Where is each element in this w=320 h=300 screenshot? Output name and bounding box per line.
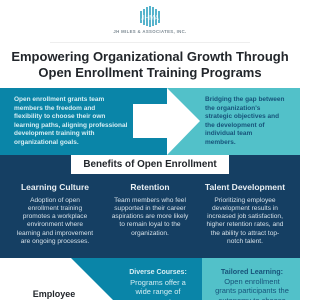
tailored learning text: Open enrollment [224,276,280,286]
employee heading: Employee [33,289,75,299]
retention: Retention [130,182,170,192]
intro right text: the development of [205,122,265,129]
benefits heading: Benefits of Open Enrollment [83,159,217,170]
panel: diverse courses [71,258,202,300]
learning culture: learning and improvement [17,230,93,237]
title [11,49,289,80]
learning culture: Adoption of open [30,196,80,204]
intro left text: organizational goals. [14,139,79,146]
arrow [133,88,200,155]
intro right text [205,96,284,146]
panel: tailored learning [202,258,300,300]
intro right text: Bridging the gap between [205,96,284,103]
talent development: Prioritizing employee [214,196,276,204]
intro left text [14,96,127,146]
panel: intro left [0,88,167,155]
intro left text: learning paths, aligning professional [14,122,127,129]
learning culture: promotes a workplace [23,213,87,220]
retention: aspirations are more likely [112,213,188,220]
intro right text: strategic objectives and [205,113,279,120]
intro left text: development training with [14,130,95,137]
talent development: increased job satisfaction, [207,213,283,220]
benefits heading [71,155,229,174]
panel: benefits [0,155,300,258]
intro left text: flexibility to choose their own [14,113,105,120]
logo [140,6,160,27]
title: Empowering Organizational Growth Through [11,49,289,64]
intro right text: individual team [205,130,252,137]
intro left text: members the freedom and [14,105,95,112]
tailored learning text [215,267,289,300]
retention [112,182,188,237]
talent development: higher retention rates, and [206,221,283,228]
retention: to remain loyal to the [119,221,181,228]
talent development: the ability to attract top- [211,230,279,237]
logo: JHMA [141,15,159,22]
diverse courses text: Diverse Courses: [129,269,187,276]
retention: supported in their career [114,205,186,212]
talent development: development results in [212,205,278,212]
intro right text: members. [205,139,236,146]
learning culture: are ongoing processes. [21,238,89,245]
learning culture: Learning Culture [21,182,89,192]
retention: organization. [131,230,169,237]
panel: intro right [167,88,300,155]
intro right text: the organization's [205,105,260,112]
tailored learning text: grants participants the [215,286,289,295]
learning culture [17,182,94,245]
intro left text: Open enrollment grants team [14,96,104,103]
learning culture: environment where [27,221,83,228]
diverse courses text: wide range of [135,287,181,296]
talent development: Talent Development [205,182,285,192]
title: Open Enrollment Training Programs [38,65,262,80]
diverse courses text [129,268,187,300]
diverse courses text: Programs offer a [130,278,186,286]
talent development: notch talent. [227,238,263,245]
company name: JH MILES & ASSOCIATES, INC. [113,29,187,34]
talent development [204,182,285,245]
retention: Team members who feel [114,196,186,204]
tailored learning text: Tailored Learning: [221,267,283,276]
learning culture: enrollment training [28,205,82,212]
